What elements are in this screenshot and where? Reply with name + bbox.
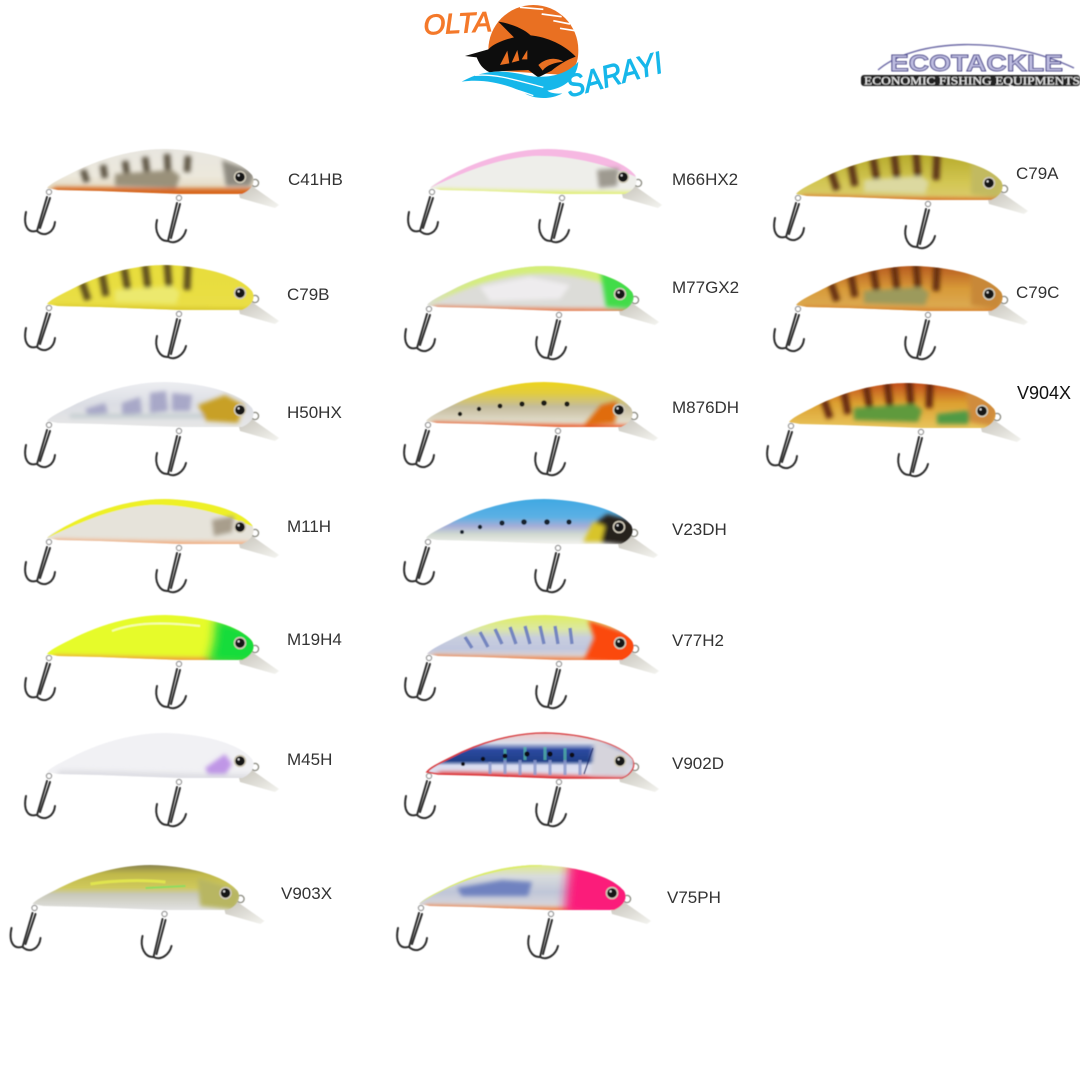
code label: H50HX [287, 403, 342, 422]
code label: M66HX2 [672, 170, 738, 189]
lure image [774, 263, 1028, 359]
tagline bar [861, 75, 1080, 86]
logo: Ecotackle [861, 45, 1080, 88]
wordmark OLTA: OLTA [423, 6, 493, 41]
wordmark Ecotackle: ECOTACKLE [890, 50, 1063, 76]
tagline: ECONOMIC FISHING EQUIPMENTS [864, 76, 1080, 88]
lure image [405, 262, 659, 359]
code label: V75PH [667, 888, 721, 907]
wave highlight [475, 75, 543, 96]
sun disc [488, 5, 578, 75]
lure M876DH [404, 382, 739, 475]
code label: V902D [672, 754, 724, 773]
code label: C79C [1016, 283, 1059, 302]
belly bars [490, 760, 580, 775]
lure M45H [25, 733, 332, 826]
lure V77H2 [405, 615, 724, 708]
lure image [397, 856, 651, 958]
lure C79C [774, 263, 1059, 359]
code label: V77H2 [672, 631, 724, 650]
code label: C79B [287, 285, 330, 304]
wordmark SARAYI: SARAYI [562, 46, 667, 104]
lure M66HX2 [408, 145, 738, 242]
shark silhouette [465, 22, 576, 77]
lure V902D [405, 733, 724, 826]
lure C79A [774, 152, 1059, 248]
lure image [774, 152, 1028, 248]
sun streaks [520, 7, 575, 31]
arc [878, 45, 1074, 70]
code label: V23DH [672, 520, 727, 539]
lure C79B [25, 262, 330, 358]
lure V75PH [397, 856, 721, 958]
spots [461, 751, 574, 766]
spots [460, 519, 572, 534]
lure image [25, 495, 279, 592]
lure M19H4 [25, 615, 342, 708]
code label: M19H4 [287, 630, 342, 649]
shark markings [500, 50, 563, 71]
code label: V904X [1017, 383, 1071, 403]
lure image [404, 499, 658, 592]
lure V23DH [404, 499, 727, 592]
lure V904X [767, 380, 1071, 476]
code label: V903X [281, 884, 332, 903]
lure M77GX2 [405, 262, 739, 359]
logo: Olta Sarayi [423, 5, 667, 104]
code label: M876DH [672, 398, 739, 417]
lure image [408, 145, 662, 242]
spots [458, 400, 570, 416]
code label: M77GX2 [672, 278, 739, 297]
lure image [25, 615, 279, 708]
lure image [25, 733, 279, 826]
lure image [11, 865, 265, 958]
lure image [25, 262, 279, 358]
lure image [405, 615, 659, 708]
lure image [25, 382, 279, 475]
scale bars [465, 626, 572, 648]
lure V903X [11, 865, 332, 958]
lure H50HX [25, 382, 342, 475]
code label: C79A [1016, 164, 1059, 183]
lure image [767, 380, 1021, 476]
code label: M11H [287, 517, 331, 536]
lure image [405, 733, 659, 826]
code label: C41HB [288, 170, 343, 189]
lure image [404, 382, 658, 475]
lure M11H [25, 495, 331, 592]
lure C41HB [25, 149, 343, 242]
code label: M45H [287, 750, 332, 769]
waves [462, 62, 578, 98]
lure image [25, 149, 279, 242]
